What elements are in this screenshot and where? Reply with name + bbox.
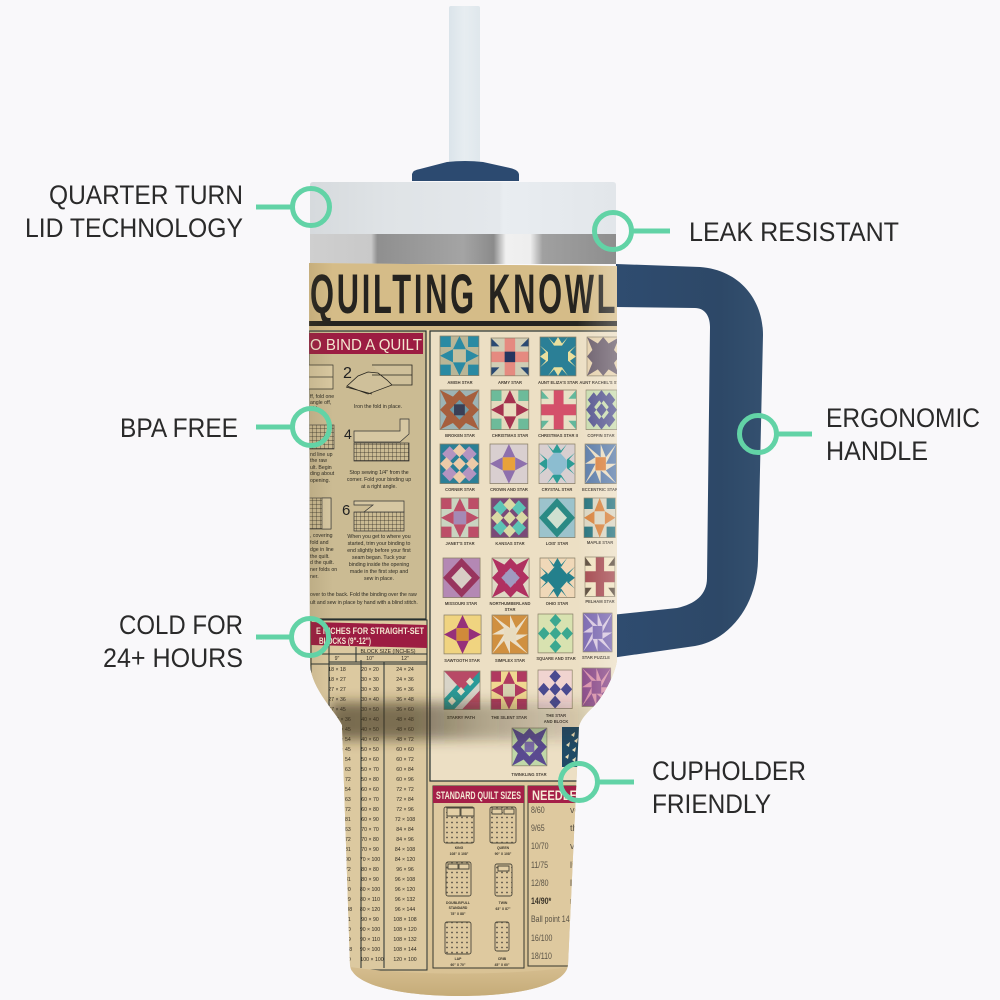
row 5 labels: NORTHUMBERLAND bbox=[490, 601, 531, 606]
panel: standard quilt sizes bbox=[433, 786, 524, 968]
table column: 10 inch: 80 × 110 bbox=[360, 897, 380, 903]
table column: 9 inch: 27 × 36 bbox=[328, 697, 346, 703]
step 5 text: dge in line bbox=[310, 547, 334, 553]
callout text: QUARTER TURN bbox=[49, 180, 243, 210]
callout text: CUPHOLDER bbox=[652, 756, 806, 786]
table column: 9 inch: 45 × 45 bbox=[333, 747, 351, 753]
step 5 text: d the quilt. bbox=[310, 560, 334, 566]
table column: 12 inch: 96 × 132 bbox=[395, 897, 415, 903]
table column: 9 inch: 72 × 90 bbox=[333, 887, 351, 893]
row 6 labels: STAR PUZZLE bbox=[582, 655, 610, 660]
table column: 9 inch: 90 × 90 bbox=[333, 957, 351, 963]
table column: 9 inch: 72 × 72 bbox=[333, 867, 351, 873]
tumbler bbox=[300, 6, 763, 1000]
needle sizes list: 11/75 bbox=[531, 860, 548, 870]
row 3 labels: CORNER STAR bbox=[445, 487, 475, 492]
callout: cupholder friendly bbox=[560, 756, 806, 819]
panel: needle sizes bbox=[528, 786, 598, 966]
needle uses list: m bbox=[570, 896, 578, 906]
row 5 labels: OHIO STAR bbox=[546, 601, 568, 606]
table column: 12 inch: 96 × 96 bbox=[396, 867, 414, 873]
table column: 9 inch: 54 × 81 bbox=[333, 817, 351, 823]
table column: 9 inch: 18 × 18 bbox=[328, 667, 346, 673]
callout text: LID TECHNOLOGY bbox=[25, 213, 243, 243]
table column: 9 inch: 36 × 54 bbox=[333, 737, 351, 743]
step 5 text: the quilt. bbox=[310, 554, 330, 560]
table column: 12 inch: 120 × 100 bbox=[393, 957, 417, 963]
straw bbox=[449, 6, 480, 164]
bed labels: 60" X 70" bbox=[451, 963, 466, 967]
step 3 text: ding about bbox=[310, 471, 335, 477]
table column: 9 inch: 81 × 108 bbox=[332, 947, 352, 953]
step 2 text: Iron the fold in place. bbox=[354, 404, 402, 410]
step 6 text: When you get to where you bbox=[347, 534, 411, 540]
table column: 10 inch: 90 × 90 bbox=[361, 917, 379, 923]
callout marker bbox=[560, 764, 634, 800]
table column: 10 inch: 60 × 60 bbox=[361, 787, 379, 793]
row 6 labels: SAWTOOTH STAR bbox=[444, 658, 480, 663]
step 2 number: 2 bbox=[343, 365, 352, 382]
table heading: E INCHES FOR STRAIGHT-SET bbox=[316, 626, 424, 637]
table column: 10 inch: 50 × 70 bbox=[361, 767, 379, 773]
table column: 9 inch: 81 × 99 bbox=[333, 937, 351, 943]
step 4 text: corner. Fold your binding up bbox=[347, 477, 411, 483]
step 6 text: started, trim your binding to bbox=[348, 541, 411, 547]
table column: 12 inch: 84 × 108 bbox=[395, 847, 415, 853]
needle sizes list: Ball point 14 bbox=[531, 914, 570, 924]
step 3 text: nd line up bbox=[310, 452, 333, 458]
table column: 10 inch: 70 × 90 bbox=[361, 847, 379, 853]
needle sizes list: 8/60 bbox=[531, 805, 545, 815]
step 5 sketch bbox=[309, 498, 331, 529]
table column: 10 inch: 30 × 50 bbox=[361, 707, 379, 713]
table heading: BLOCKS (9"-12") bbox=[319, 636, 371, 647]
row 1 labels: AUNT RACHEL'S STAR bbox=[579, 380, 625, 385]
table column: 9 inch: 45 × 63 bbox=[333, 767, 351, 773]
row 8 blocks bbox=[512, 727, 582, 767]
table column: 9 inch: 63 × 90 bbox=[333, 857, 351, 863]
callout text: 24+ HOURS bbox=[103, 643, 243, 673]
callout text: HANDLE bbox=[826, 436, 928, 466]
table column: 12 inch: 36 × 60 bbox=[396, 707, 414, 713]
row 4 labels: JANET'S STAR bbox=[445, 541, 475, 546]
callout: ergonomic handle bbox=[740, 403, 980, 466]
table column: 10 inch: 30 × 40 bbox=[361, 697, 379, 703]
callout: leak resistant bbox=[594, 212, 899, 250]
table column: 10 inch: 50 × 50 bbox=[361, 747, 379, 753]
needle sizes list: 16/100 bbox=[531, 933, 553, 943]
needle sizes list: 18/110 bbox=[531, 951, 552, 961]
callout: quarter turn lid technology bbox=[25, 180, 330, 243]
table sub heading: BLOCK SIZE (INCHES) bbox=[360, 649, 416, 655]
table column: 9 inch: 63 × 81 bbox=[333, 847, 351, 853]
row 1 labels: ARMY STAR bbox=[498, 380, 522, 385]
row 7 labels: AND BLOCK bbox=[544, 719, 568, 724]
table column: 9 inch: 63 × 63 bbox=[333, 827, 351, 833]
table column: 12 inch: 84 × 120 bbox=[395, 857, 415, 863]
table column: 10 inch: 60 × 70 bbox=[361, 797, 379, 803]
bed labels: STANDARD bbox=[449, 906, 468, 910]
row 7 labels: THE SILENT STAR bbox=[491, 715, 527, 720]
final step text: over to the back. Fold the binding over the raw bbox=[310, 592, 417, 598]
step 6 text: seam began. Tuck your bbox=[352, 555, 406, 561]
table grid lines bbox=[311, 645, 427, 968]
table column: 10 inch: 80 × 120 bbox=[360, 907, 380, 913]
row 7 blocks bbox=[444, 668, 611, 710]
table column: 12 inch: 36 × 36 bbox=[396, 687, 414, 693]
sizes heading band bbox=[433, 786, 524, 803]
step 5 text: ner folds on bbox=[310, 567, 337, 573]
table column: 9 inch: 27 × 27 bbox=[328, 687, 346, 693]
table column: 10 inch: 80 × 100 bbox=[360, 887, 380, 893]
table column: 9 inch: 45 × 72 bbox=[333, 777, 351, 783]
handle bbox=[611, 264, 763, 658]
table column: 12 inch: 96 × 108 bbox=[395, 877, 415, 883]
step 2 iron bbox=[346, 365, 412, 394]
step 3 sketch bbox=[309, 425, 334, 449]
callout text: COLD FOR bbox=[119, 610, 243, 640]
row 4 labels: KANSAS STAR bbox=[495, 541, 525, 546]
table column: 12 inch: 60 × 72 bbox=[396, 757, 414, 763]
panel heading band bbox=[309, 333, 423, 354]
row 2 labels: CHRISTMAS STAR bbox=[492, 433, 528, 438]
callout marker bbox=[256, 408, 330, 446]
title rule bbox=[309, 321, 617, 326]
step 1 text: old. bbox=[310, 406, 318, 412]
table column: 10 inch: 70 × 80 bbox=[361, 837, 379, 843]
step 6 text: end slightly before your first bbox=[347, 548, 411, 554]
step 4 number: 4 bbox=[344, 426, 352, 442]
needle uses list: h bbox=[570, 933, 575, 943]
callout text: BPA FREE bbox=[120, 413, 238, 443]
step 3 text: ult. Begin bbox=[310, 465, 332, 471]
table column: 9 inch: 36 × 36 bbox=[333, 717, 351, 723]
table column: 12 inch: 48 × 60 bbox=[396, 727, 414, 733]
table column: 9 inch: 81 × 81 bbox=[333, 917, 351, 923]
row 3 blocks bbox=[440, 444, 616, 484]
table column: 9 inch: 54 × 54 bbox=[333, 787, 351, 793]
table column: 12 inch: 84 × 96 bbox=[396, 837, 414, 843]
table column: 10 inch: 40 × 40 bbox=[361, 717, 379, 723]
row 2 blocks bbox=[440, 390, 617, 430]
callout text: LEAK RESISTANT bbox=[689, 217, 899, 247]
table column: 12 inch: 36 × 48 bbox=[396, 697, 414, 703]
step 6 number: 6 bbox=[342, 502, 350, 519]
table column: 12 inch: 72 × 108 bbox=[395, 817, 415, 823]
table heading band bbox=[311, 622, 427, 648]
needle uses list: v bbox=[570, 951, 575, 961]
table column: 10 inch: 70 × 100 bbox=[360, 857, 380, 863]
table column: 10 inch: 80 × 90 bbox=[361, 877, 379, 883]
step 4 sketch bbox=[354, 419, 409, 461]
needle uses list: lig bbox=[570, 878, 579, 888]
step 5 text: fold and bbox=[310, 540, 329, 546]
body paper bbox=[300, 255, 630, 1000]
step 6 text: made in the first step and bbox=[350, 569, 408, 575]
table column: 10 inch: 40 × 60 bbox=[361, 737, 379, 743]
bed labels: 45" X 60" bbox=[495, 963, 510, 967]
table column: 9 inch: 36 × 45 bbox=[333, 727, 351, 733]
table column: 12 inch: 60 × 96 bbox=[396, 777, 414, 783]
row 5 labels: STAR bbox=[505, 607, 515, 612]
bed labels: KING bbox=[455, 846, 464, 850]
step 6 text: binding inside the opening bbox=[349, 562, 409, 568]
table column: 9 inch: 81 × 90 bbox=[333, 927, 351, 933]
needle sizes list: 10/70 bbox=[531, 841, 549, 851]
step 6 sketch bbox=[354, 501, 404, 531]
row 7 labels: THE STAR bbox=[546, 713, 566, 718]
row 4 blocks bbox=[441, 498, 615, 538]
callout: bpa free bbox=[120, 408, 330, 446]
lid bbox=[310, 182, 616, 234]
table column: 10 inch: 50 × 80 bbox=[361, 777, 379, 783]
needle sizes list: 9/65 bbox=[531, 823, 545, 833]
row 4 labels: LOIS' STAR bbox=[546, 541, 568, 546]
step 3 text: opening. bbox=[310, 478, 330, 484]
needle uses list: ve bbox=[570, 805, 580, 815]
row 1 labels: AUNT ELIZA'S STAR bbox=[538, 380, 578, 385]
callout text bbox=[103, 610, 243, 673]
table column: 12 inch: 72 × 96 bbox=[396, 807, 414, 813]
callout text bbox=[652, 756, 806, 819]
table column: 9 inch: 18 × 27 bbox=[328, 677, 346, 683]
row 1 labels: AMISH STAR bbox=[447, 380, 473, 385]
bed labels: 90" X 108" bbox=[495, 852, 512, 856]
table column: 9 inch: 54 × 72 bbox=[333, 807, 351, 813]
table column: 12 inch: 72 × 72 bbox=[396, 787, 414, 793]
tumbler body wrap bbox=[300, 255, 630, 1000]
callout marker bbox=[740, 416, 812, 452]
bed labels: 78" X 88" bbox=[451, 912, 466, 916]
table column: 12 inch: 108 × 108 bbox=[393, 917, 417, 923]
row 2 labels: BROKEN STAR bbox=[445, 433, 475, 438]
table column: 9 inch: 72 × 108 bbox=[332, 907, 352, 913]
table column: 9 inch: 72 × 99 bbox=[333, 897, 351, 903]
callout marker bbox=[594, 212, 670, 250]
table column: 9 inch: 63 × 72 bbox=[333, 837, 351, 843]
table column: 9 inch: 27 × 45 bbox=[328, 707, 346, 713]
table column: 10 inch: 90 × 110 bbox=[360, 937, 380, 943]
step 4 text: at a right angle. bbox=[361, 484, 397, 490]
lid cap tab bbox=[412, 161, 519, 181]
table column: 10 inch: 60 × 80 bbox=[361, 807, 379, 813]
step 4 text: Stop sewing 1/4" from the bbox=[349, 470, 409, 476]
row 8 label: TWINKLING STAR bbox=[511, 772, 547, 777]
needle sizes list: 12/80 bbox=[531, 878, 549, 888]
bed labels: 108" X 108" bbox=[450, 852, 469, 856]
table column: 12 inch: 24 × 24 bbox=[396, 667, 414, 673]
needle sizes list: 14/90* bbox=[531, 896, 552, 906]
table column: 12 inch: 72 × 84 bbox=[396, 797, 414, 803]
row 7 labels: STARRY PATH bbox=[447, 715, 475, 720]
table column: 10 inch: 80 × 80 bbox=[361, 867, 379, 873]
top title band bbox=[309, 262, 617, 330]
bed labels: DOUBLE/FULL bbox=[446, 901, 470, 905]
table column: 10 inch: 50 × 60 bbox=[361, 757, 379, 763]
callout marker bbox=[256, 188, 330, 226]
table column: 10 inch: 70 × 70 bbox=[361, 827, 379, 833]
steel ring bbox=[310, 234, 616, 264]
row 6 labels: SQUARE AND STAR bbox=[536, 656, 576, 661]
table column: 12 inch: 96 × 120 bbox=[395, 887, 415, 893]
step 1 text: angle off, bbox=[310, 400, 331, 406]
final step text: ult and sew in place by hand with a blind stitch. bbox=[310, 600, 418, 606]
table column: 12 inch: 60 × 60 bbox=[396, 747, 414, 753]
needle uses list: ve bbox=[570, 841, 580, 851]
panel: how to bind a quilt bbox=[309, 331, 426, 619]
row 3 labels: CROWN AND STAR bbox=[490, 487, 528, 492]
table column: 12 inch: 24 × 36 bbox=[396, 677, 414, 683]
table column: 10 inch: 90 × 100 bbox=[360, 947, 380, 953]
callout marker bbox=[256, 618, 328, 656]
row 3 labels: CRYSTAL STAR bbox=[542, 487, 572, 492]
table column: 10 inch: 30 × 30 bbox=[361, 677, 379, 683]
table column: 12 inch: 108 × 120 bbox=[393, 927, 417, 933]
step 5 text: ner. bbox=[310, 574, 319, 580]
callout text: FRIENDLY bbox=[652, 789, 771, 819]
needle uses list: s bbox=[570, 914, 575, 924]
table column: 12 inch: 48 × 72 bbox=[396, 737, 414, 743]
table column: 10 inch: 30 × 30 bbox=[361, 687, 379, 693]
table column: 10 inch: 90 × 100 bbox=[360, 927, 380, 933]
sizes heading: STANDARD QUILT SIZES bbox=[436, 790, 521, 802]
bed labels: CRIB bbox=[498, 957, 507, 961]
table column: 12 inch: 48 × 48 bbox=[396, 717, 414, 723]
row 2 labels: CHRISTMAS STAR II bbox=[538, 433, 578, 438]
row 6 blocks bbox=[444, 613, 612, 654]
step 3 text: the raw bbox=[310, 458, 327, 464]
body edge shading bbox=[300, 255, 630, 1000]
row 5 blocks bbox=[443, 557, 615, 598]
needle uses list: th bbox=[570, 823, 578, 833]
panel: quilt star blocks bbox=[430, 331, 625, 781]
bed labels: 63" X 87" bbox=[496, 907, 511, 911]
shoulder shadow bbox=[330, 702, 595, 740]
step 1 text: ff, fold one bbox=[310, 394, 334, 400]
table sub heading: 10" bbox=[366, 656, 374, 662]
row 2 labels: COFFIN STAR bbox=[587, 433, 615, 438]
needle heading: NEEDLE bbox=[532, 787, 577, 803]
row 5 labels: MISSOURI STAR bbox=[445, 601, 477, 606]
bed labels: LAP bbox=[455, 957, 462, 961]
panel heading: O BIND A QUILT bbox=[310, 337, 423, 354]
bed labels: QUEEN bbox=[497, 846, 510, 850]
bottom cap bbox=[345, 966, 575, 1000]
table column: 9 inch: 54 × 63 bbox=[333, 797, 351, 803]
panel: binding inches table bbox=[311, 620, 427, 970]
table heading bbox=[316, 626, 424, 647]
table column: 10 inch: 60 × 90 bbox=[361, 817, 379, 823]
table sub heading: 12" bbox=[401, 656, 409, 662]
table column: 12 inch: 84 × 84 bbox=[396, 827, 414, 833]
step 6 text: sew in place. bbox=[364, 576, 394, 582]
callout text bbox=[826, 403, 980, 466]
step 5 text: , covering bbox=[310, 533, 333, 539]
row 5 labels: PELHAM STAR bbox=[585, 599, 615, 604]
callout: cold for 24+ hours bbox=[103, 610, 328, 673]
needle heading band bbox=[528, 786, 588, 803]
table column: 12 inch: 96 × 144 bbox=[395, 907, 415, 913]
table column: 9 inch: 45 × 54 bbox=[333, 757, 351, 763]
needle uses list: lig bbox=[570, 860, 579, 870]
table sub heading: 9" bbox=[335, 656, 340, 662]
row 1 blocks bbox=[440, 336, 619, 376]
bed labels: TWIN bbox=[499, 901, 508, 905]
row 3 labels: ECCENTRIC STAR bbox=[582, 487, 618, 492]
step 1 sketch bbox=[309, 365, 333, 389]
table column: 10 inch: 20 × 20 bbox=[361, 667, 379, 673]
table column: 9 inch: 72 × 81 bbox=[333, 877, 351, 883]
title: QUILTING KNOWL bbox=[310, 262, 618, 325]
callout text: ERGONOMIC bbox=[826, 403, 980, 433]
table column: 12 inch: 108 × 144 bbox=[393, 947, 417, 953]
bed diagrams bbox=[444, 807, 516, 954]
callout text bbox=[25, 180, 243, 243]
table column: 10 inch: 40 × 50 bbox=[361, 727, 379, 733]
row 6 labels: SIMPLEX STAR bbox=[495, 658, 525, 663]
table column: 10 inch: 100 × 100 bbox=[360, 957, 384, 963]
table column: 12 inch: 60 × 84 bbox=[396, 767, 414, 773]
table column: 12 inch: 108 × 132 bbox=[393, 937, 417, 943]
row 4 labels: MAPLE STAR bbox=[587, 540, 613, 545]
